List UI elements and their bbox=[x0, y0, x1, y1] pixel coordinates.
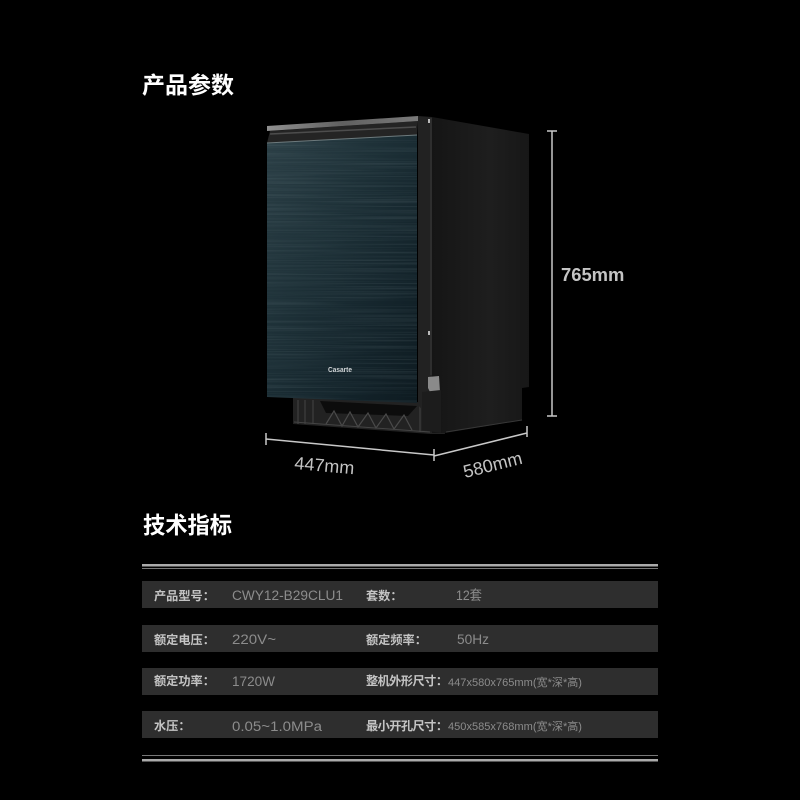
door top trim bbox=[267, 116, 418, 131]
height dimension bbox=[547, 131, 624, 416]
spec row 4: 450x585x768mm(宽*深*高) bbox=[448, 719, 582, 733]
spec row 4: 最小开孔尺寸： bbox=[366, 718, 448, 733]
spec row 1: 套数： bbox=[366, 588, 403, 603]
spec row 2: 220V~ bbox=[232, 632, 276, 647]
infographic canvas bbox=[142, 73, 658, 762]
height dimension: 765mm bbox=[561, 264, 624, 285]
spec row 1: 产品型号： bbox=[154, 588, 215, 603]
dishwasher product image bbox=[267, 116, 529, 434]
spec row 4 bbox=[142, 711, 658, 738]
width dimension: 447mm bbox=[294, 453, 355, 478]
hinge bbox=[428, 376, 440, 396]
spec row 3: 447x580x765mm(宽*深*高) bbox=[448, 675, 582, 689]
brand logo: Casarte bbox=[328, 365, 352, 374]
bottom rule bbox=[142, 755, 658, 762]
spec row 3: 额定功率： bbox=[154, 673, 215, 688]
spec row 4: 0.05~1.0MPa bbox=[232, 719, 323, 734]
base and kick plate bbox=[293, 397, 445, 434]
spec row 3 bbox=[142, 668, 658, 695]
width dimension bbox=[266, 433, 434, 478]
spec row 1 bbox=[142, 581, 658, 608]
depth dimension: 580mm bbox=[461, 448, 524, 482]
spec row 3: 整机外形尺寸： bbox=[366, 673, 448, 688]
door glass panel bbox=[267, 135, 417, 403]
heading: product parameters: 产品参数 bbox=[142, 72, 234, 98]
spec row 2: 额定频率： bbox=[366, 632, 427, 647]
spec row 1: 12套 bbox=[456, 588, 482, 603]
heading: technical specs: 技术指标 bbox=[143, 512, 232, 538]
depth dimension bbox=[434, 426, 527, 482]
cabinet side bbox=[432, 117, 529, 433]
centre post bbox=[418, 116, 432, 433]
top rule bbox=[142, 564, 658, 569]
brushed texture bbox=[267, 135, 417, 403]
spec row 2: 50Hz bbox=[457, 632, 489, 647]
bottom edge highlight bbox=[446, 420, 522, 432]
spec row 2 bbox=[142, 625, 658, 652]
spec row 3: 1720W bbox=[232, 674, 275, 689]
spec row 2: 额定电压： bbox=[154, 632, 215, 647]
door top edge bbox=[267, 135, 417, 143]
door handle recess bbox=[267, 121, 418, 143]
spec row 1: CWY12-B29CLU1 bbox=[232, 588, 343, 603]
spec row 4: 水压： bbox=[154, 718, 191, 733]
